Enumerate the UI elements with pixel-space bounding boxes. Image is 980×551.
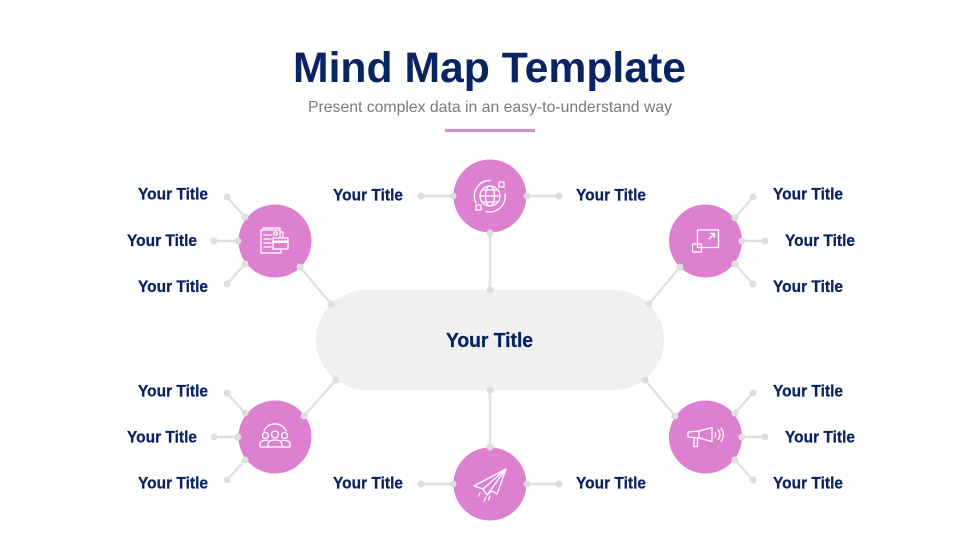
label: upper-right 2: Your Title <box>785 231 855 250</box>
icon: documents and card <box>261 228 288 253</box>
label: lower-left 3: Your Title <box>138 474 208 492</box>
node: bottom centre <box>418 444 562 520</box>
connector: upper-left node to centre <box>296 264 331 304</box>
node: top centre <box>418 160 562 236</box>
subtitle: Present complex data in an easy-to-understand way <box>308 99 672 116</box>
node: upper left <box>210 194 312 288</box>
title: Mind Map Template <box>293 44 686 92</box>
connector: lower-left node to centre <box>300 380 336 420</box>
label: lower-right 1: Your Title <box>773 382 843 400</box>
label: lower-right 3: Your Title <box>773 474 843 492</box>
connector: upper-right node to centre <box>649 264 684 304</box>
title underline accent <box>445 129 535 132</box>
icon: globe with sync arrows <box>474 180 505 212</box>
label: upper-left 1: Your Title <box>138 184 208 204</box>
icon: resize squares <box>692 230 718 252</box>
icon: megaphone <box>688 428 723 446</box>
label: upper-right 3: Your Title <box>773 277 843 296</box>
label: upper-left 3: Your Title <box>138 277 208 296</box>
label: lower-right 2: Your Title <box>785 428 855 446</box>
connector: bottom node to centre <box>486 390 494 450</box>
central pill <box>316 286 664 394</box>
node: lower right <box>669 390 768 484</box>
label: lower-left 1: Your Title <box>138 382 208 400</box>
node: lower left <box>210 390 312 484</box>
label: upper-right 1: Your Title <box>773 184 843 204</box>
node: upper right <box>669 194 768 288</box>
label: lower-left 2: Your Title <box>127 428 197 446</box>
icon: paper plane <box>474 469 506 501</box>
label: top-right of top node: Your Title <box>576 186 646 204</box>
label: upper-left 2: Your Title <box>127 231 197 250</box>
label: bottom-left of bottom node: Your Title <box>333 474 403 492</box>
central label: Your Title <box>446 329 533 352</box>
label: bottom-right of bottom node: Your Title <box>576 474 646 492</box>
connector: top node to centre <box>486 230 494 290</box>
icon: group of people <box>260 424 290 447</box>
connector: lower-right node to centre <box>645 380 678 420</box>
label: top-left of top node: Your Title <box>333 186 403 204</box>
